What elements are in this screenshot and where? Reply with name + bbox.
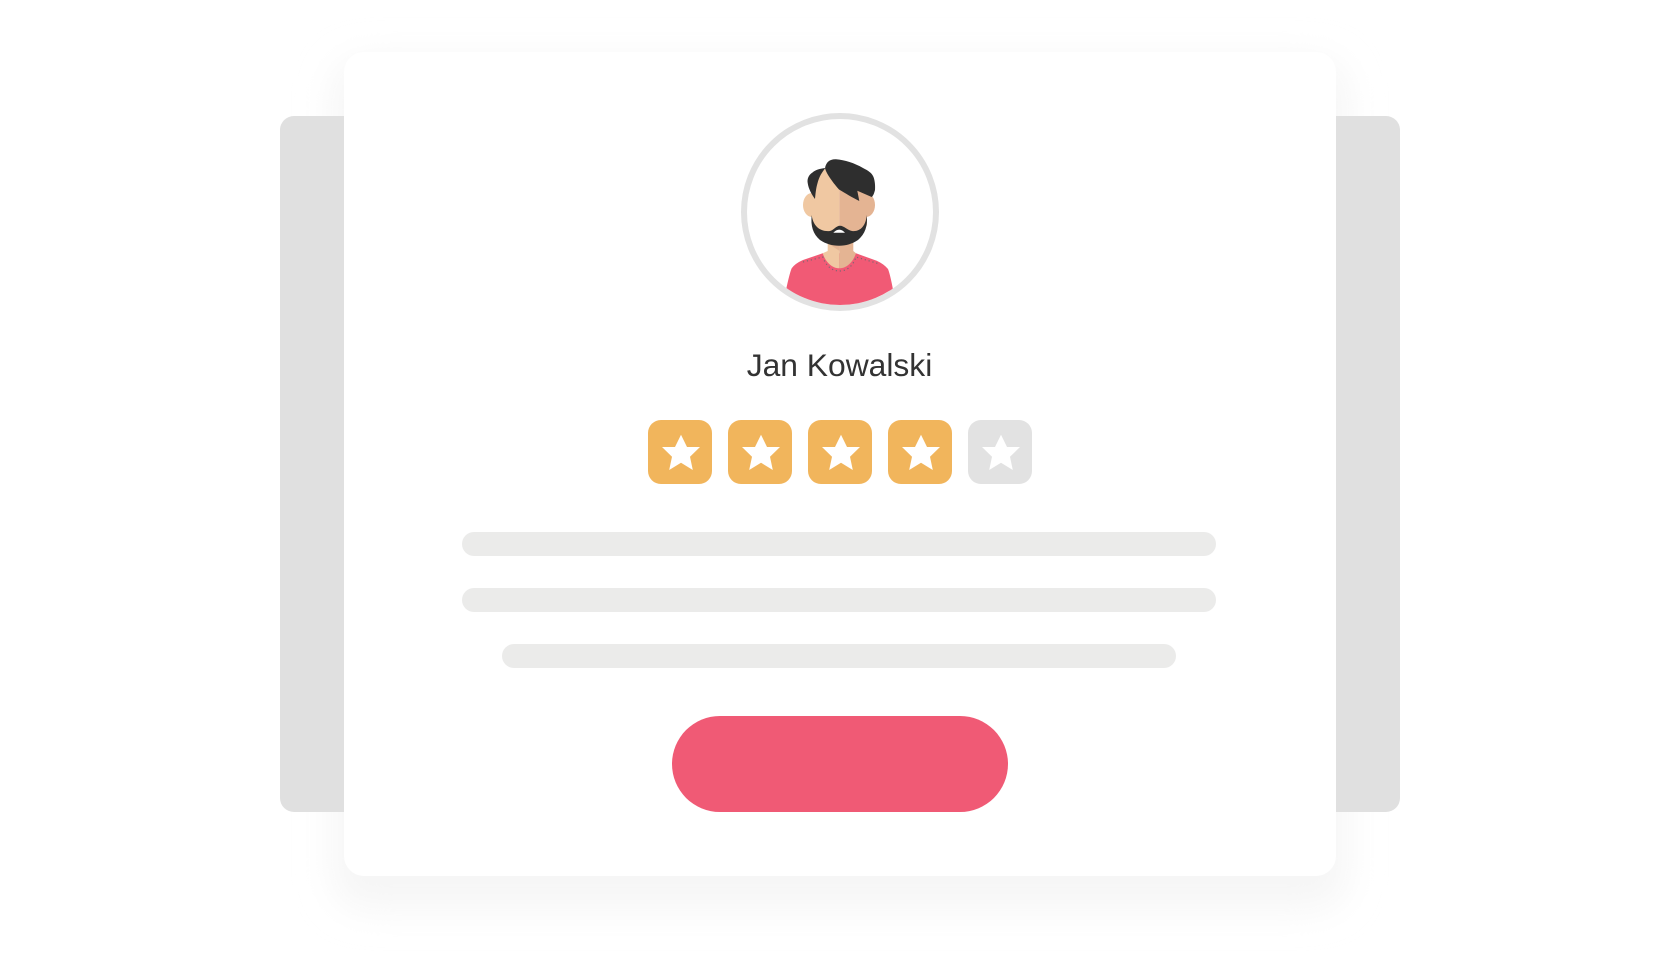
star tile 3 [808, 420, 872, 484]
button [672, 716, 1008, 812]
star tile 5 (empty) [968, 420, 1032, 484]
avatar ring [744, 116, 936, 308]
face [812, 165, 867, 242]
placeholder text line 2 [462, 588, 1216, 612]
placeholder text line 3 [502, 644, 1176, 668]
card shadow [332, 58, 1348, 910]
star rating [648, 420, 1032, 484]
collar stitching [803, 257, 878, 271]
neck [823, 238, 856, 268]
name: Jan Kowalski [747, 347, 932, 383]
hair [808, 159, 875, 201]
star tile 2 [728, 420, 792, 484]
beard [811, 215, 867, 246]
avatar [744, 116, 936, 320]
ears [803, 193, 875, 217]
shirt [786, 253, 893, 305]
placeholder text line 1 [462, 532, 1216, 556]
illustration: review card [280, 113, 1400, 888]
back panel: left [280, 116, 360, 812]
main card [344, 52, 1336, 876]
star tile 1 [648, 420, 712, 484]
star tile 4 [888, 420, 952, 484]
back panel: right [1320, 116, 1400, 812]
